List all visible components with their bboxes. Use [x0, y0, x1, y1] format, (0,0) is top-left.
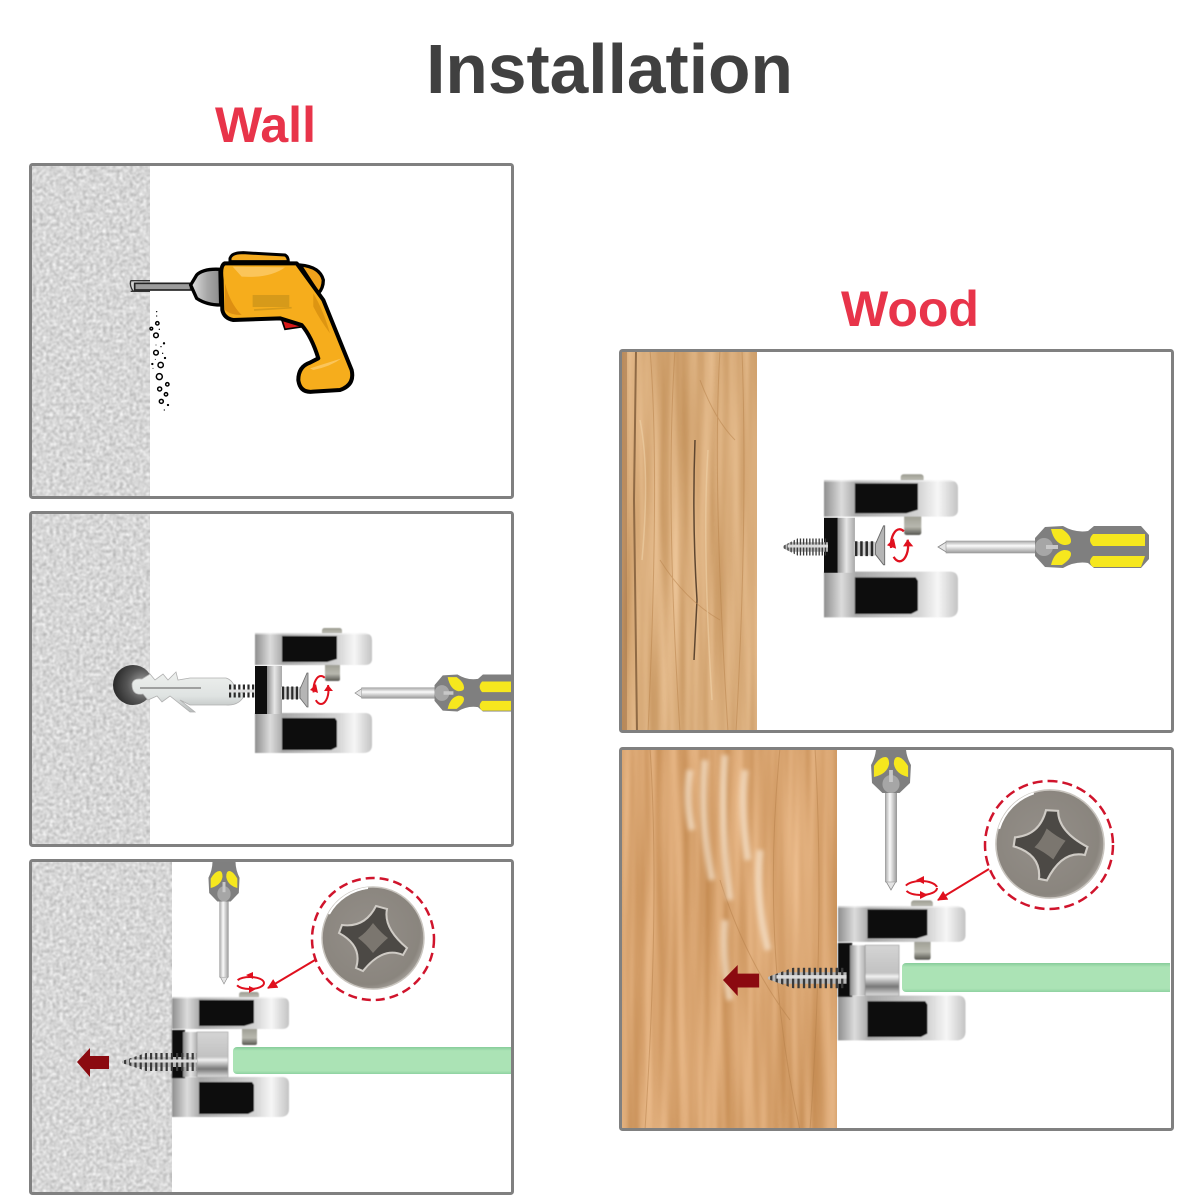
icon: screwdriver horizontal	[938, 526, 1149, 568]
icon: drill dust	[150, 311, 169, 411]
wall texture 2	[30, 512, 150, 846]
panel: wood step 1 clamp	[620, 350, 1173, 732]
icon: screwdriver horizontal	[355, 675, 528, 711]
icon: rotation arrow	[236, 972, 264, 993]
callout: screw head detail	[985, 780, 1114, 909]
icon: wood screw	[768, 972, 847, 984]
icon: red direction arrow	[723, 965, 759, 996]
icon: wood screw	[783, 542, 828, 552]
icon: screwdriver vertical	[208, 862, 240, 984]
panel: wall step 3 tighten	[32, 862, 511, 1192]
wood texture 2	[620, 748, 837, 1130]
icon: power drill	[130, 253, 352, 411]
icon: drilled hole	[113, 665, 153, 705]
icon: red direction arrow	[77, 1048, 109, 1077]
panel: wall step 2 anchor and clamp	[30, 512, 528, 846]
panel: wood step 2 tighten	[622, 750, 1170, 1128]
icon: glass panel	[233, 1047, 523, 1074]
heading: wood: Wood	[841, 281, 979, 337]
icon: clamp with nut	[838, 900, 966, 1040]
title: Installation	[426, 30, 793, 108]
callout: screw head detail	[312, 878, 434, 1000]
icon: wall anchor	[132, 672, 256, 712]
icon: glass panel	[902, 963, 1182, 992]
wall texture 3	[30, 860, 172, 1194]
panel: wall step 1 drilling	[32, 166, 354, 496]
icon: wood screw	[122, 1057, 197, 1067]
wood texture 1	[620, 350, 757, 732]
icon: clamp open	[824, 474, 958, 617]
arrow: leader to screw	[268, 960, 315, 988]
icon: clamp open	[255, 628, 372, 753]
icon: rotation arrow	[905, 876, 937, 899]
icon: clamp with nut	[172, 992, 289, 1117]
wall texture 1	[30, 164, 150, 498]
icon: screwdriver vertical	[871, 750, 911, 891]
arrow: leader to screw	[938, 869, 989, 900]
heading: wall: Wall	[215, 97, 316, 153]
